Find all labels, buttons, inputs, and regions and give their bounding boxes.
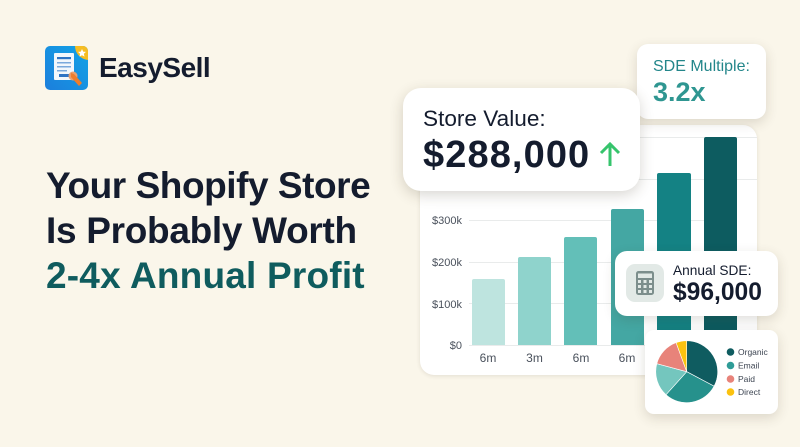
icon: calculator <box>626 264 664 302</box>
SDE multiple label: SDE Multiple: <box>653 58 750 75</box>
icon: EasySell form and cursor <box>45 46 88 90</box>
panel: bar chart <box>420 125 757 375</box>
headline: Your Shopify Store <box>46 165 370 206</box>
callout: store value <box>403 88 640 191</box>
legend: Paid <box>738 374 755 384</box>
annual SDE amount: $96,000 <box>673 279 762 306</box>
legend: Organic <box>738 347 769 357</box>
x axis labels: 6m <box>573 351 589 365</box>
x axis labels <box>480 351 635 365</box>
bar chart <box>432 137 757 365</box>
headline: Is Probably Worth <box>46 210 357 251</box>
callout: SDE multiple <box>637 44 766 119</box>
legend: Email <box>738 360 759 370</box>
store value amount: $288,000 <box>423 134 590 176</box>
pie chart <box>656 341 718 403</box>
y axis labels <box>432 215 462 352</box>
x axis labels: 6m <box>480 351 496 365</box>
y axis labels: $200k <box>432 257 462 269</box>
y axis labels: $100k <box>432 299 462 311</box>
headline <box>46 165 370 296</box>
logo: EasySell <box>45 46 210 90</box>
y axis labels: $300k <box>432 215 462 227</box>
brand name: EasySell <box>99 52 210 83</box>
legend <box>726 347 769 397</box>
legend: Direct <box>738 387 761 397</box>
bars <box>472 137 737 345</box>
y axis labels: $0 <box>450 340 462 352</box>
headline: 2-4x Annual Profit <box>46 255 365 296</box>
panel: traffic source pie chart <box>645 330 778 414</box>
x axis labels: 3m <box>526 351 543 365</box>
store value label: Store Value: <box>423 106 546 131</box>
callout: annual SDE <box>615 251 778 316</box>
annual SDE label: Annual SDE: <box>673 263 751 278</box>
SDE multiple value: 3.2x <box>653 77 706 107</box>
x axis labels: 6m <box>619 351 635 365</box>
icon: up arrow <box>600 142 620 166</box>
